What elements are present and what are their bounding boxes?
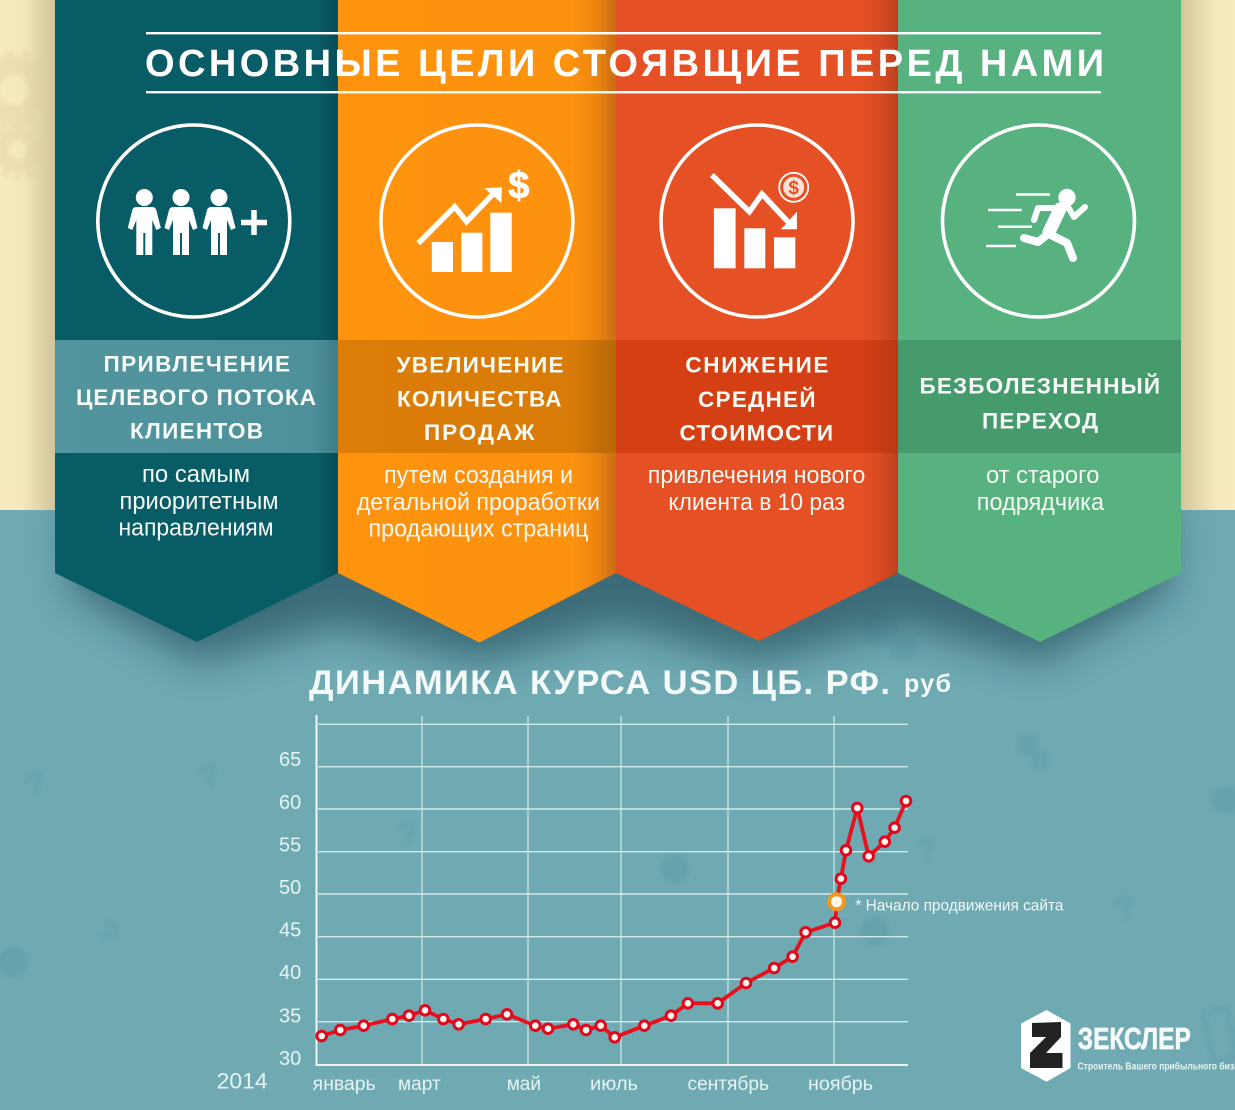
- icon: growth chart with dollar: $: [508, 165, 529, 207]
- band: orange heading: УВЕЛИЧЕНИЕ: [396, 352, 564, 378]
- text: red description: [648, 462, 865, 516]
- text: orange description: продающих страниц: [368, 516, 588, 542]
- x axis labels: [217, 1068, 873, 1095]
- annotation: * Начало продвижения сайта: [855, 898, 1063, 914]
- y axis labels: 35: [279, 1006, 301, 1028]
- y axis labels: [279, 749, 301, 1070]
- logo: Zexler: [1021, 1010, 1235, 1082]
- data line: [322, 801, 906, 1037]
- band: green heading: [898, 340, 1181, 453]
- text: green description: [977, 462, 1104, 516]
- icon: growth chart with dollar: [381, 125, 573, 317]
- band: teal heading: ПРИВЛЕЧЕНИЕ: [104, 352, 290, 376]
- title with rules: ОСНОВНЫЕ ЦЕЛИ СТОЯВЩИЕ ПЕРЕД НАМИ: [145, 43, 1104, 85]
- band: teal heading: КЛИЕНТОВ: [130, 418, 263, 444]
- y axis labels: 30: [279, 1048, 301, 1070]
- background watermark symbols on teal: ?: [88, 912, 127, 955]
- x axis labels: ноябрь: [808, 1074, 873, 1095]
- text: teal description: приоритетным: [120, 488, 278, 515]
- icon: people plus: [98, 125, 290, 317]
- text: teal description: по самым: [142, 461, 250, 488]
- band: green heading: ПЕРЕХОД: [982, 408, 1098, 434]
- background watermark symbols on teal: ?: [393, 814, 423, 856]
- band: teal heading: [55, 340, 338, 453]
- panel: teal ribbon: [55, 0, 338, 642]
- background watermark symbols on teal: ?: [21, 763, 51, 805]
- x axis labels: январь: [313, 1074, 376, 1095]
- band: orange heading: КОЛИЧЕСТВА: [397, 386, 562, 412]
- y axis labels: 50: [279, 877, 301, 899]
- icon: falling chart with coin: $: [788, 178, 799, 199]
- x axis labels: 2014: [217, 1068, 268, 1094]
- x axis labels: сентябрь: [688, 1074, 769, 1095]
- x axis labels: май: [507, 1074, 541, 1095]
- background: cream upper area: [0, 0, 1235, 510]
- text: orange description: [357, 462, 600, 542]
- panel: red ribbon: [616, 0, 898, 641]
- background gears on cream: [0, 54, 50, 177]
- band: orange heading: ПРОДАЖ: [424, 420, 535, 445]
- panel: orange ribbon: [338, 0, 616, 642]
- x axis labels: март: [398, 1074, 441, 1095]
- background watermark symbols on teal: ?: [1110, 888, 1140, 930]
- band: teal heading: ЦЕЛЕВОГО ПОТОКА: [76, 385, 316, 410]
- chart grid: [316, 715, 908, 1065]
- data points: [317, 796, 911, 1042]
- y axis labels: 60: [279, 792, 301, 814]
- line chart: USD rate: [217, 715, 1063, 1095]
- text: red description: клиента в 10 раз: [668, 489, 845, 516]
- text: teal description: направлениям: [118, 514, 274, 542]
- y axis labels: 55: [279, 834, 301, 856]
- y axis labels: 65: [279, 749, 301, 771]
- text: teal description: [118, 461, 278, 542]
- x axis labels: июль: [590, 1074, 638, 1095]
- band: red heading: СТОИМОСТИ: [680, 420, 833, 446]
- y axis labels: 40: [279, 962, 301, 984]
- highlighted point: promotion start: [829, 894, 844, 909]
- logo: Zexler: ЗЕКСЛЕР: [1078, 1021, 1191, 1056]
- background watermark symbols on teal: ?: [194, 756, 224, 798]
- icon: running person: [942, 125, 1134, 317]
- chart heading: руб: [904, 670, 951, 698]
- chart heading: ДИНАМИКА КУРСА USD ЦБ. РФ.: [309, 664, 890, 702]
- y axis labels: 45: [279, 920, 301, 942]
- text: green description: подрядчика: [977, 489, 1104, 516]
- background watermark symbols on teal: ?: [912, 830, 942, 872]
- band: red heading: СРЕДНЕЙ: [698, 387, 816, 412]
- text: green description: от старого: [986, 462, 1099, 489]
- band: red heading: [616, 340, 898, 453]
- background: teal lower area: [0, 510, 1235, 1110]
- icon: falling chart with coin: [661, 125, 853, 317]
- text: orange description: путем создания и: [384, 462, 573, 489]
- panel: green ribbon: [898, 0, 1181, 642]
- band: red heading: СНИЖЕНИЕ: [685, 352, 828, 378]
- text: orange description: детальной проработки: [357, 489, 600, 516]
- background watermark symbols on teal: [0, 610, 1235, 1062]
- text: red description: привлечения нового: [648, 462, 865, 489]
- band: green heading: БЕЗБОЛЕЗНЕННЫЙ: [920, 374, 1160, 398]
- band: orange heading: [338, 340, 616, 453]
